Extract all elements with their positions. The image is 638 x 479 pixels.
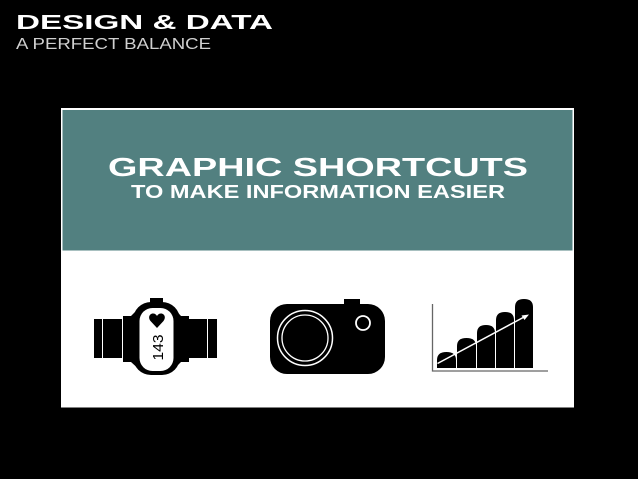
icon: smartwatch with heart rate: 143 — [150, 334, 167, 360]
icon: camera — [270, 299, 385, 374]
panel: white card — [61, 108, 574, 408]
heading: Design & Data: DESIGN & DATA — [16, 12, 273, 34]
subtitle: to make information easier: TO MAKE INFORMATION EASIER — [131, 182, 505, 202]
icon: rising bar chart with arrow — [432, 299, 548, 371]
panel: teal banner — [62, 110, 572, 250]
icon: smartwatch with heart rate — [94, 298, 217, 375]
subheading: a perfect balance: A PERFECT BALANCE — [16, 36, 211, 53]
title: Graphic Shortcuts: GRAPHIC SHORTCUTS — [108, 152, 528, 182]
